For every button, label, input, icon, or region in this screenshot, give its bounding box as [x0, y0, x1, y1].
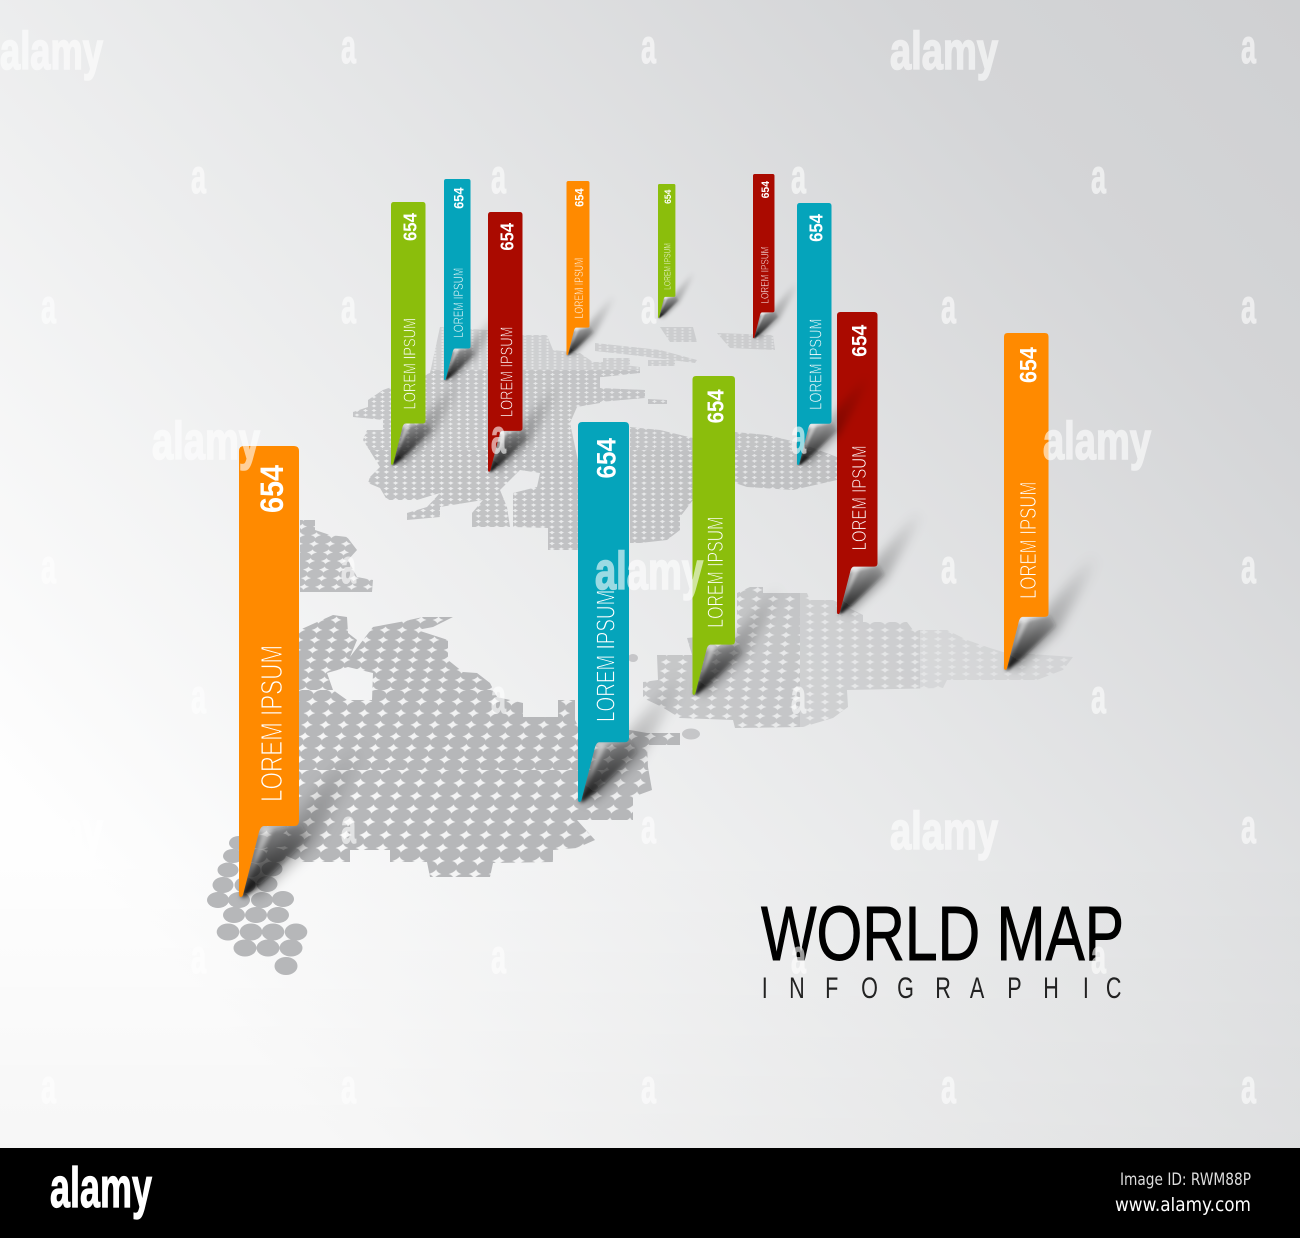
watermarks: a — [641, 1061, 656, 1114]
map: southern tip dots — [207, 833, 307, 975]
watermarks: a — [1241, 281, 1256, 334]
watermarks: a — [341, 281, 356, 334]
pin: red upper: 654 — [496, 222, 517, 251]
pin: green upper left — [391, 202, 466, 465]
pin: red upper: LOREM IPSUM — [497, 327, 517, 417]
watermarks: a — [341, 21, 356, 74]
dotted world map — [207, 320, 1080, 975]
watermarks: a — [41, 1061, 56, 1114]
watermarks: a — [491, 151, 506, 204]
watermarks: a — [191, 671, 206, 724]
pin: orange right: 654 — [1016, 347, 1043, 383]
subtitle: INFOGRAPHIC: INFOGRAPHIC — [762, 970, 1122, 1005]
watermarks: a — [341, 801, 356, 854]
pin: orange small — [566, 181, 616, 355]
pin: teal small: LOREM IPSUM — [451, 268, 466, 338]
watermarks: a — [191, 931, 206, 984]
map: far upper continents — [353, 327, 837, 550]
watermarks: alamy — [890, 22, 998, 81]
watermarks: a — [41, 281, 56, 334]
pin: green tiny: LOREM IPSUM — [663, 243, 672, 290]
pin: red large: LOREM IPSUM — [848, 445, 871, 551]
pin: green middle: 654 — [704, 389, 729, 423]
watermarks: a — [791, 151, 806, 204]
pin: teal right — [797, 203, 872, 465]
pin: green middle — [692, 376, 785, 695]
pin: teal small: 654 — [452, 187, 467, 209]
watermarks: a — [1241, 801, 1256, 854]
pin: orange right — [1004, 333, 1100, 670]
pin: teal large: 654 — [590, 438, 621, 478]
watermarks: a — [1091, 931, 1106, 984]
map: right continent — [635, 585, 1080, 735]
watermarks: a — [791, 411, 806, 464]
pin: green upper left: LOREM IPSUM — [400, 318, 420, 410]
watermarks: a — [1241, 1061, 1256, 1114]
pin: red upper — [488, 212, 563, 472]
pin: red small: LOREM IPSUM — [759, 246, 771, 304]
watermarks: a — [491, 931, 506, 984]
watermarks: a — [491, 411, 506, 464]
title: WORLD MAP: WORLD MAP — [761, 891, 1124, 977]
pin: orange right: LOREM IPSUM — [1015, 482, 1041, 599]
watermarks: a — [941, 541, 956, 594]
website: www.alamy.com — [1115, 1194, 1251, 1216]
watermarks: alamy — [890, 802, 998, 861]
watermarks: a — [641, 21, 656, 74]
watermarks: alamy — [152, 412, 260, 471]
pin: orange large: LOREM IPSUM — [254, 645, 289, 802]
footer logo: alamy — [50, 1156, 152, 1220]
watermarks: a — [491, 671, 506, 724]
watermarks: a — [1241, 541, 1256, 594]
pin: teal small — [444, 179, 501, 380]
watermarks: alamy — [0, 22, 103, 81]
pin: teal large: LOREM IPSUM — [590, 590, 621, 722]
watermarks: a — [791, 931, 806, 984]
watermarks: a — [641, 801, 656, 854]
pin: orange small: LOREM IPSUM — [572, 258, 586, 318]
watermarks: a — [1091, 151, 1106, 204]
watermarks: alamy — [0, 802, 103, 861]
watermarks: a — [191, 151, 206, 204]
pin: green upper left: 654 — [399, 212, 420, 241]
pin: orange large: 654 — [254, 465, 290, 513]
watermarks: a — [791, 671, 806, 724]
map: small dots near right continent — [628, 654, 700, 740]
watermarks: a — [341, 541, 356, 594]
watermarks: a — [641, 281, 656, 334]
pin: orange large — [239, 446, 369, 897]
watermarks: a — [1241, 21, 1256, 74]
pin: red large: 654 — [848, 325, 872, 357]
pin: red small — [753, 174, 800, 338]
image id: Image ID: RWM88P — [1120, 1170, 1251, 1190]
footer bar — [0, 1148, 1300, 1238]
pin: green middle: LOREM IPSUM — [703, 517, 728, 628]
pin: red small: 654 — [760, 180, 772, 198]
watermarks: a — [941, 1061, 956, 1114]
pin: green tiny: 654 — [662, 189, 673, 204]
map: upper left landmass — [300, 520, 373, 592]
pin: orange small: 654 — [572, 188, 586, 207]
watermarks: alamy — [1043, 412, 1151, 471]
map: main landmass — [258, 615, 680, 877]
pin: teal right: LOREM IPSUM — [806, 319, 826, 410]
pin: green tiny — [658, 184, 696, 318]
watermarks: a — [41, 541, 56, 594]
pin: teal right: 654 — [805, 213, 826, 242]
watermarks: alamy — [595, 542, 703, 601]
watermarks: a — [941, 281, 956, 334]
watermarks: a — [341, 1061, 356, 1114]
pin: teal large — [578, 422, 688, 802]
pin: red large — [837, 312, 925, 614]
watermarks: a — [1091, 671, 1106, 724]
